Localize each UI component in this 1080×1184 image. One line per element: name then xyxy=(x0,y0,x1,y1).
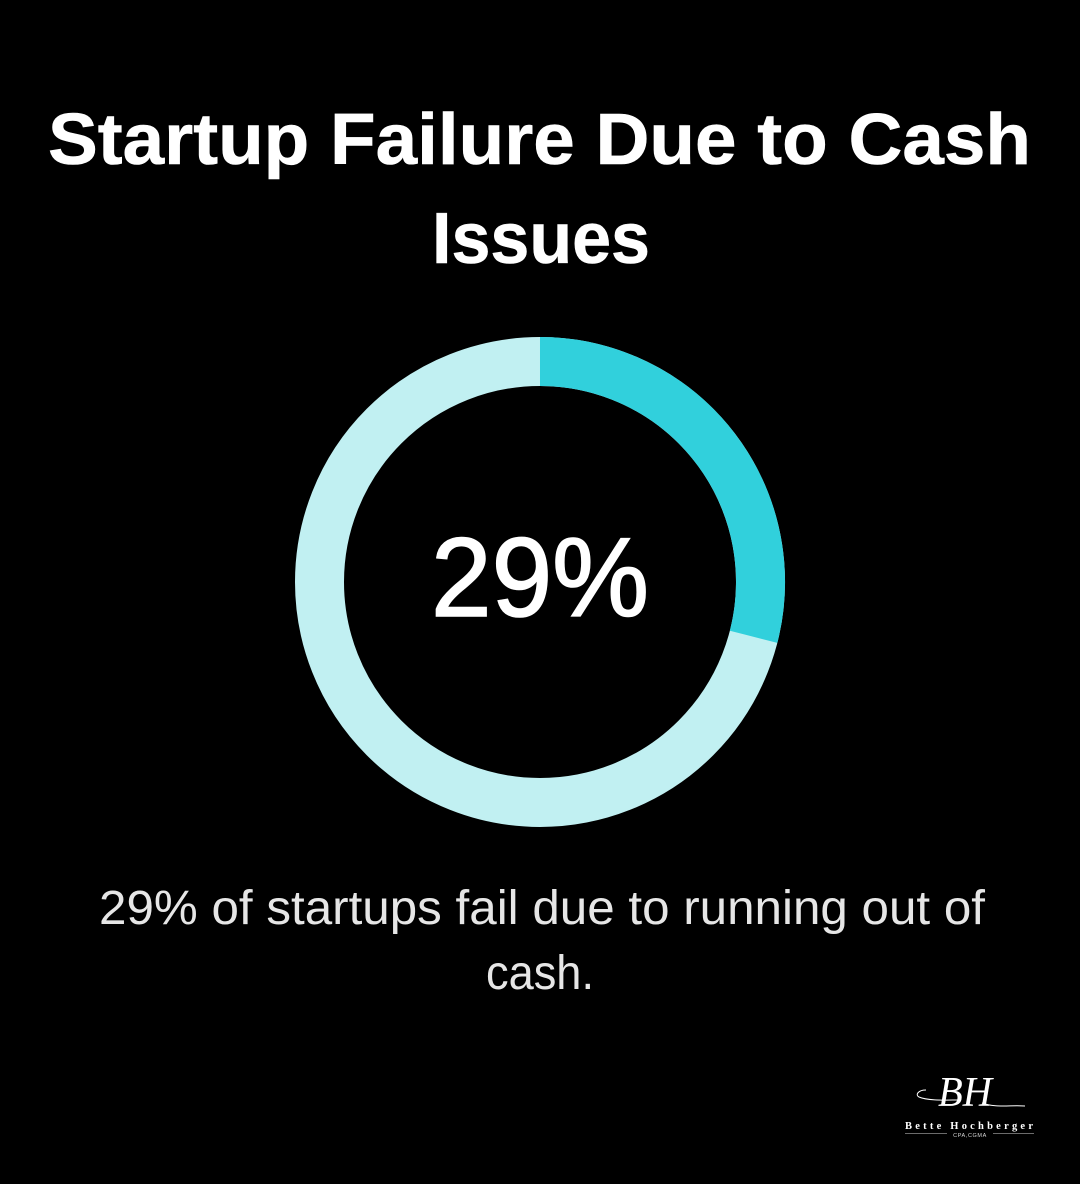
center value: 29% xyxy=(431,515,649,640)
logo signature flourish xyxy=(917,1090,1025,1106)
caption: cash. xyxy=(486,947,594,1000)
title: Startup Failure Due to Cash xyxy=(48,100,1031,180)
logo name: Bette Hochberger xyxy=(905,1121,1033,1132)
donut chart: 29% xyxy=(320,362,761,802)
logo: Bette Hochberger xyxy=(905,1070,1034,1139)
logo credentials: CPA,CGMA xyxy=(953,1133,987,1139)
caption: 29% of startups fail due to running out of xyxy=(99,882,986,935)
caption xyxy=(99,882,986,1000)
highlighted 29% segment xyxy=(540,362,761,637)
title xyxy=(48,100,1031,279)
title: Issues xyxy=(432,199,650,279)
remaining share ring xyxy=(320,362,760,802)
logo signature initials: BH xyxy=(938,1070,995,1116)
